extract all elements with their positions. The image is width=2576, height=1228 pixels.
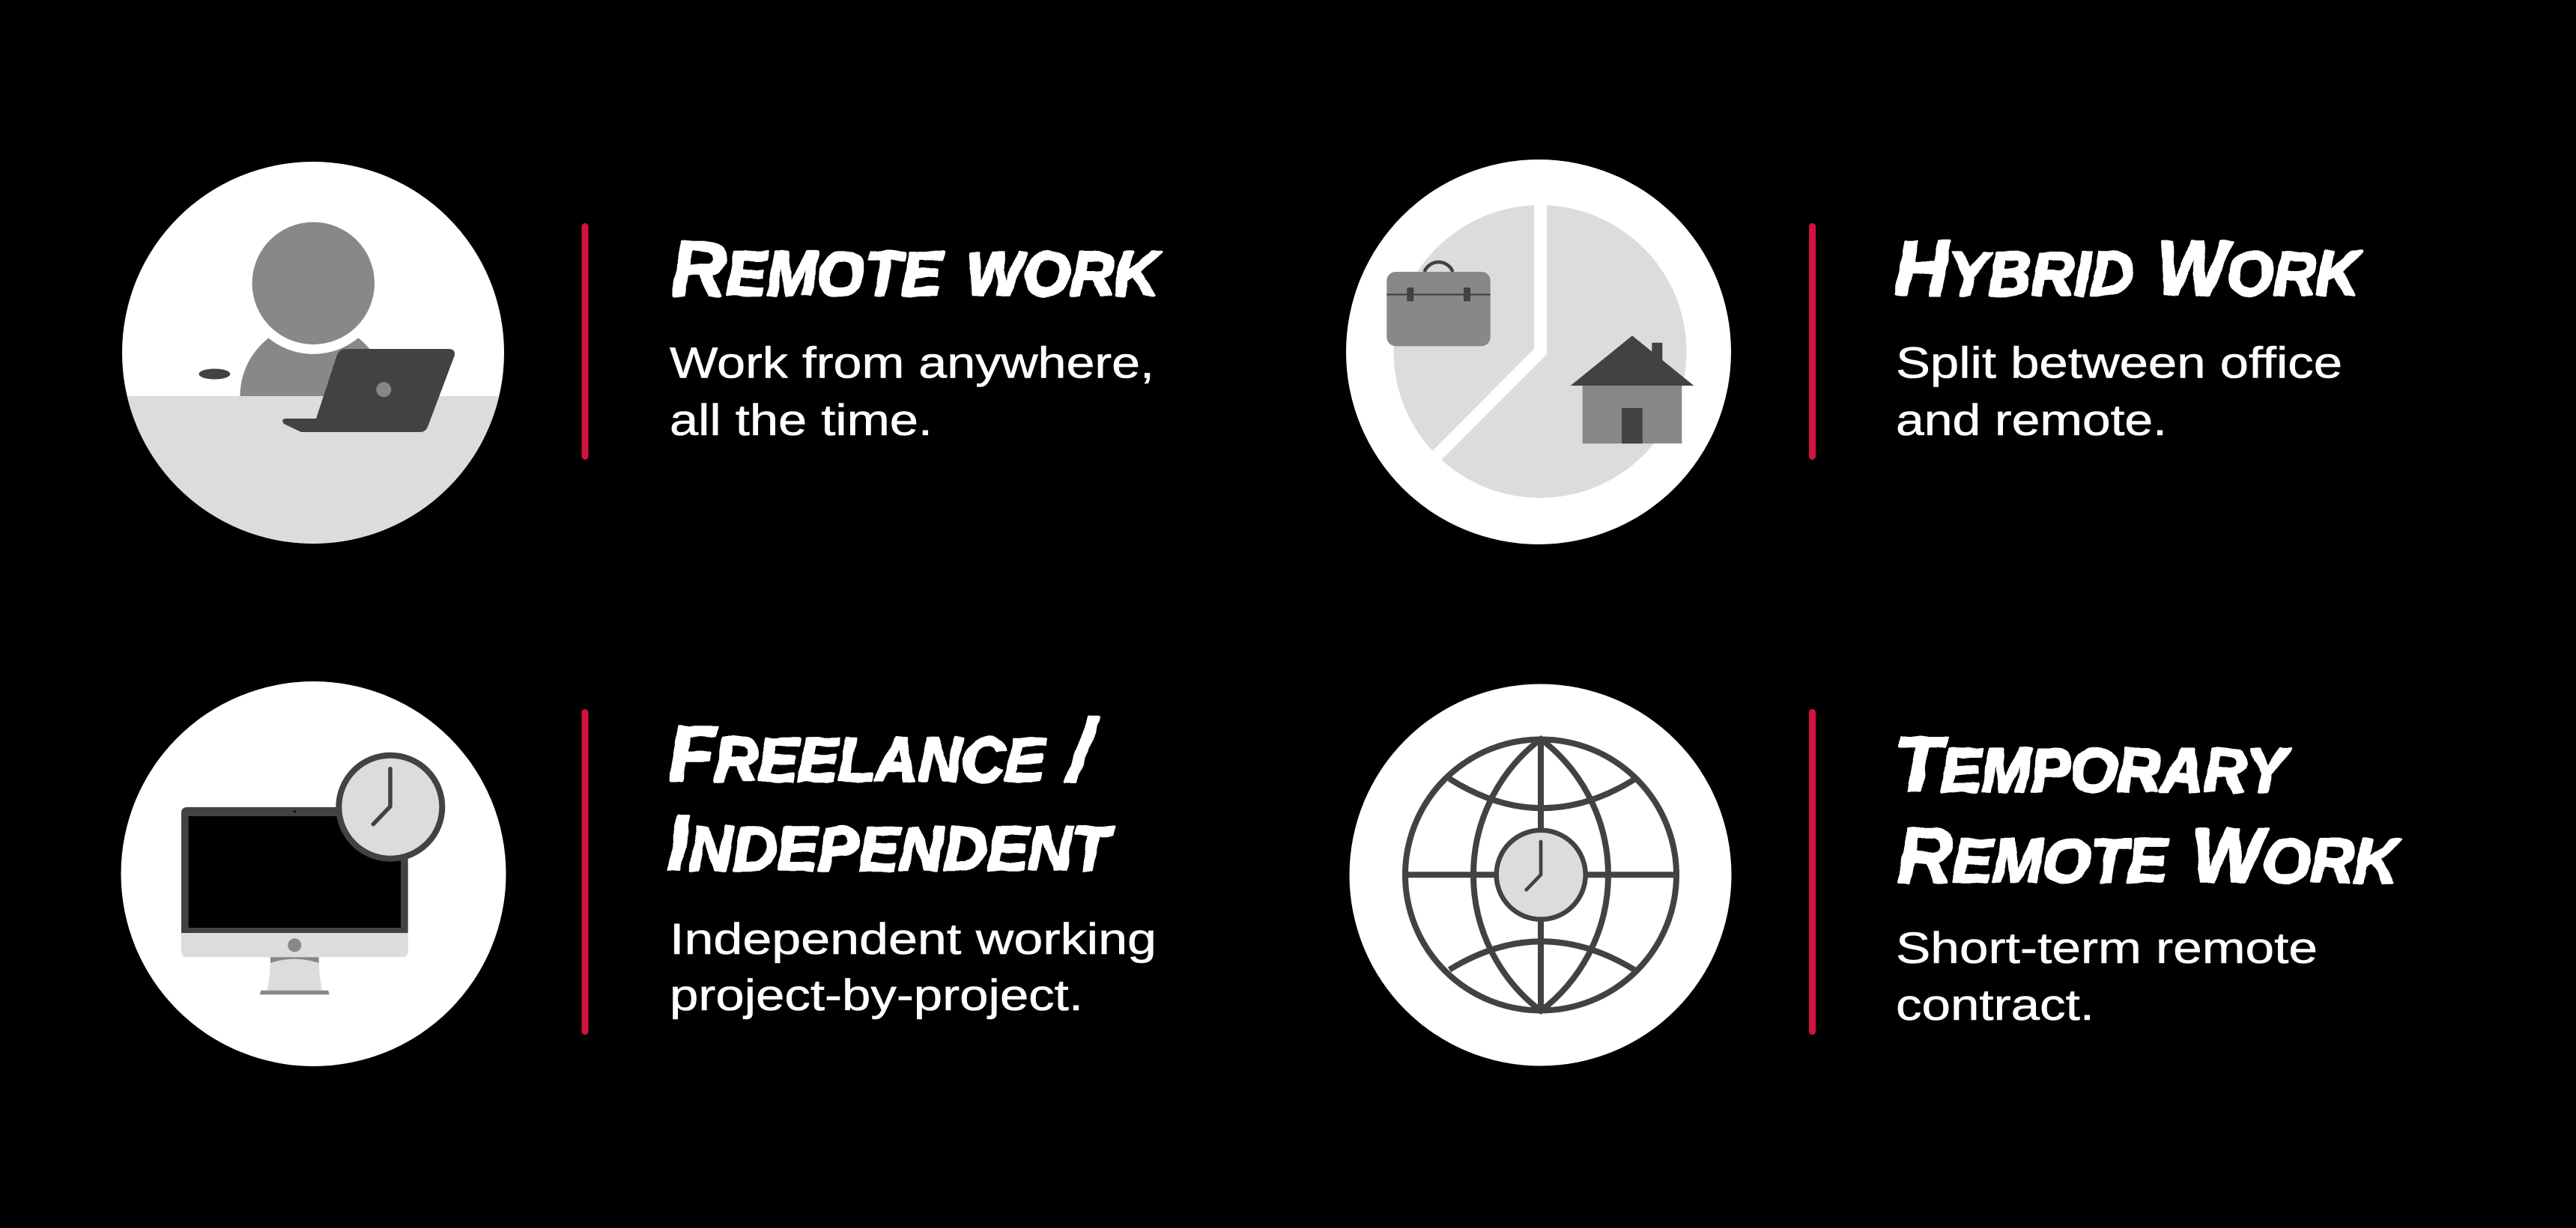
icon: globe with clock bbox=[1350, 684, 1732, 1066]
description bbox=[670, 338, 1154, 445]
icon: monitor with clock bbox=[121, 681, 506, 1066]
icon: person at laptop bbox=[122, 162, 504, 544]
heading: Remote work bbox=[671, 216, 1162, 314]
description: Split between office bbox=[1896, 338, 2342, 388]
heading: Temporary bbox=[1895, 712, 2291, 811]
description bbox=[670, 915, 1157, 1020]
description: Work from anywhere, bbox=[670, 338, 1154, 388]
panel: hybrid work bbox=[1346, 159, 2363, 544]
description: all the time. bbox=[670, 396, 933, 445]
icon: split pie with briefcase and house bbox=[1346, 159, 1731, 544]
description: Short-term remote bbox=[1896, 924, 2318, 973]
panel: remote work bbox=[122, 162, 1162, 544]
description bbox=[1896, 924, 2318, 1030]
panel: freelance independent bbox=[121, 681, 1157, 1066]
description: project-by-project. bbox=[670, 971, 1083, 1020]
description: Independent working bbox=[670, 915, 1157, 964]
divider bar bbox=[1809, 709, 1816, 1035]
heading: Remote Work bbox=[1897, 803, 2401, 902]
description: and remote. bbox=[1896, 396, 2167, 445]
description bbox=[1896, 338, 2342, 445]
panel: temporary remote work bbox=[1350, 684, 2401, 1066]
heading: Hybrid Work bbox=[1895, 216, 2363, 314]
divider bar bbox=[1809, 223, 1816, 460]
heading bbox=[667, 702, 1114, 890]
description: contract. bbox=[1896, 981, 2094, 1030]
divider bar bbox=[581, 709, 589, 1035]
heading bbox=[1895, 712, 2401, 902]
divider bar bbox=[581, 223, 589, 460]
heading: Independent bbox=[667, 791, 1114, 890]
heading: Freelance / bbox=[669, 702, 1100, 800]
